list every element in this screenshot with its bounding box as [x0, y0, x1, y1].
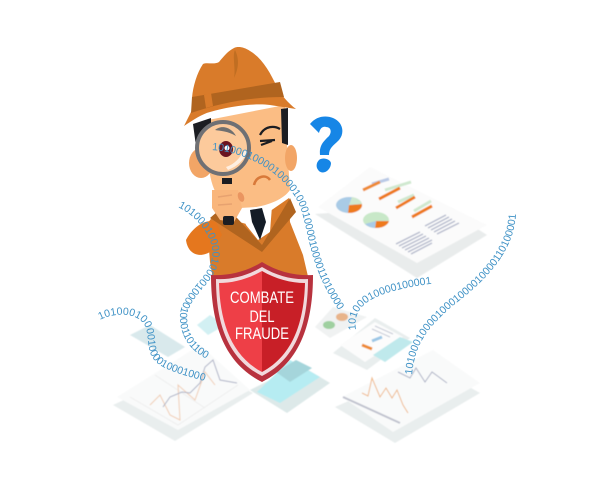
collars	[210, 198, 296, 252]
hand on chin	[212, 190, 242, 222]
shield label: FRAUDE	[235, 325, 289, 343]
binary streams: 1010001000010001000010000110100001000100	[405, 214, 516, 374]
coat	[207, 198, 310, 285]
text lines	[396, 215, 459, 254]
document: bottom left line chart	[113, 345, 253, 441]
shield	[211, 262, 313, 382]
panel: cyan block left of shield	[197, 315, 225, 335]
shield label: COMBATE	[230, 289, 294, 307]
document: bottom right charts	[335, 350, 480, 443]
magnifying glass	[197, 122, 249, 174]
nose and mouth marks	[254, 177, 270, 185]
shirt and tie	[240, 206, 272, 240]
panel: cyan stack below shield	[250, 360, 330, 413]
bar charts	[363, 179, 432, 217]
right ear	[285, 145, 297, 171]
left ear	[189, 148, 213, 178]
face	[208, 105, 290, 208]
document: top right charts	[315, 167, 487, 278]
hand on coat	[186, 221, 222, 255]
shield label: DEL	[250, 308, 274, 326]
pie charts	[336, 197, 389, 228]
handle	[218, 178, 234, 225]
detective	[184, 47, 310, 285]
small documents right of shield	[315, 307, 413, 370]
winking eye	[260, 127, 280, 145]
binary streams	[98, 143, 516, 380]
hat	[184, 47, 296, 126]
panel: pale blue block	[130, 325, 185, 357]
hair	[193, 108, 288, 146]
icon: question mark	[310, 116, 342, 172]
shield label	[230, 289, 294, 343]
